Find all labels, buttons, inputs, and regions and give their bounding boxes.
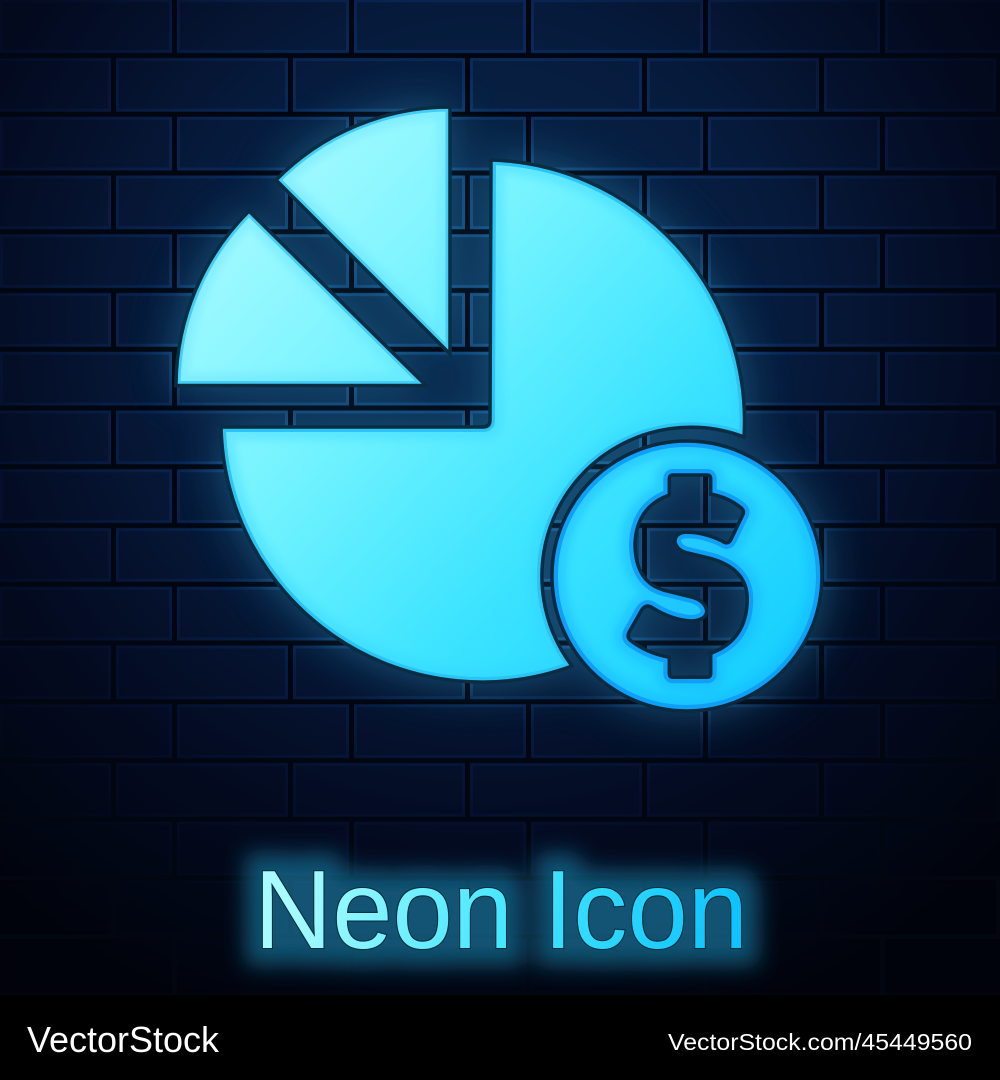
pie main body [221, 160, 744, 682]
icon: dollar coin [552, 441, 822, 711]
pie slice: upper wedge [276, 107, 450, 354]
footer bar [0, 995, 1000, 1080]
pie slice: lower wedge [176, 211, 426, 386]
watermark: VectorStock logo text: VectorStock [27, 1019, 220, 1060]
watermark: image id: VectorStock.com/45449560 [668, 1029, 972, 1055]
icon: pie chart with dollar coin [176, 107, 822, 711]
title: Neon Icon: Neon Icon [254, 848, 748, 972]
